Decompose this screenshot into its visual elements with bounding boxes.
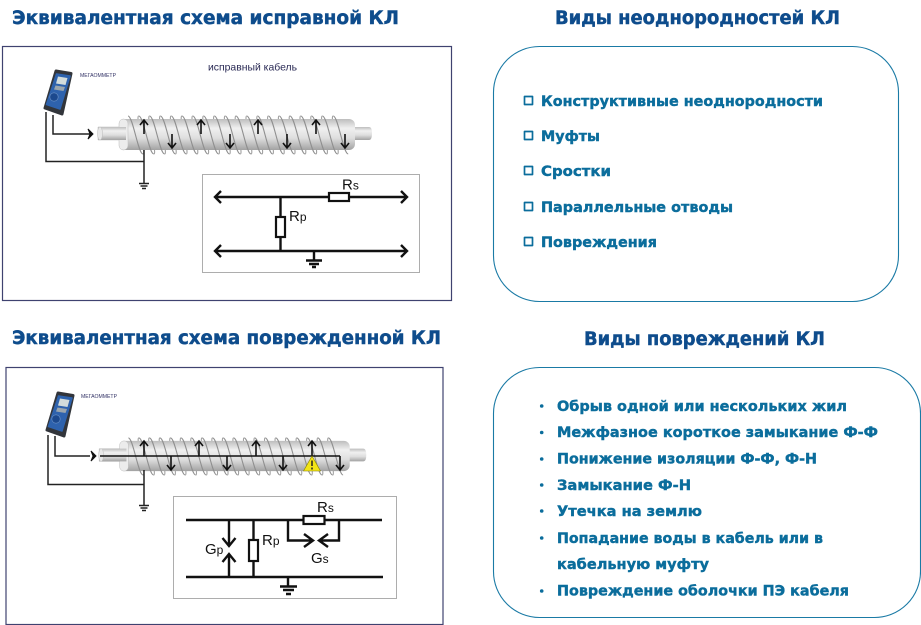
heading: types of damage: Виды повреждений КЛ [584, 328, 825, 350]
list item: Замыкание Ф-Н [557, 478, 691, 494]
list item: Повреждение оболочки ПЭ кабеля [557, 584, 849, 600]
cable illustration [98, 116, 372, 154]
panel: healthy cable diagram [2, 46, 452, 300]
heading: healthy cable scheme: Эквивалентная схема исправной КЛ [12, 7, 399, 29]
list item continuation: кабельную муфту [557, 557, 709, 573]
label: Gs: Gs [311, 550, 329, 567]
panel: damage list [494, 368, 920, 618]
panel: inhomogeneity list [494, 46, 898, 302]
bullet icons [540, 404, 544, 593]
current arrows [140, 120, 349, 148]
label: Rp: Rp [262, 532, 280, 549]
list item, two lines: Попадание воды в кабель или в [557, 531, 823, 547]
label: Rs: Rs [342, 176, 359, 194]
icon: warning triangle [304, 456, 320, 471]
checkbox icons [524, 96, 532, 246]
list item: Понижение изоляции Ф-Ф, Ф-Н [557, 452, 817, 468]
icon: megohmmeter [47, 393, 73, 436]
arrow: wire to cable [88, 129, 93, 139]
label: Rs: Rs [317, 499, 334, 516]
wiring and ground [48, 435, 149, 510]
cable illustration [99, 438, 366, 475]
label: healthy cable: исправный кабель [208, 62, 298, 74]
label: Gp: Gp [205, 541, 224, 558]
list item: Сростки [541, 164, 611, 180]
label: megohmmeter: МЕГАОММЕТР [80, 73, 117, 79]
list item: Утечка на землю [557, 504, 702, 520]
wiring and ground [46, 112, 149, 188]
icon: megohmmeter [45, 71, 71, 114]
list item: Параллельные отводы [541, 200, 733, 216]
list item: Повреждения [541, 235, 657, 251]
current arrows and core line [100, 441, 344, 470]
heading: types of inhomogeneities: Виды неоднородностей КЛ [555, 7, 840, 29]
equivalent circuit: damaged [174, 496, 396, 598]
heading: damaged cable scheme: Эквивалентная схема поврежденной КЛ [12, 327, 441, 349]
panel: damaged cable diagram [6, 368, 443, 624]
list item: Конструктивные неоднородности [541, 94, 823, 110]
list item: Межфазное короткое замыкание Ф-Ф [557, 425, 878, 441]
list item: Муфты [541, 129, 600, 145]
equivalent circuit: healthy [202, 174, 420, 272]
list item: Обрыв одной или нескольких жил [557, 399, 847, 415]
arrow: wire to cable [91, 451, 96, 461]
label: megohmmeter: МЕГАОММЕТР [81, 394, 118, 400]
label: Rp: Rp [289, 208, 307, 225]
